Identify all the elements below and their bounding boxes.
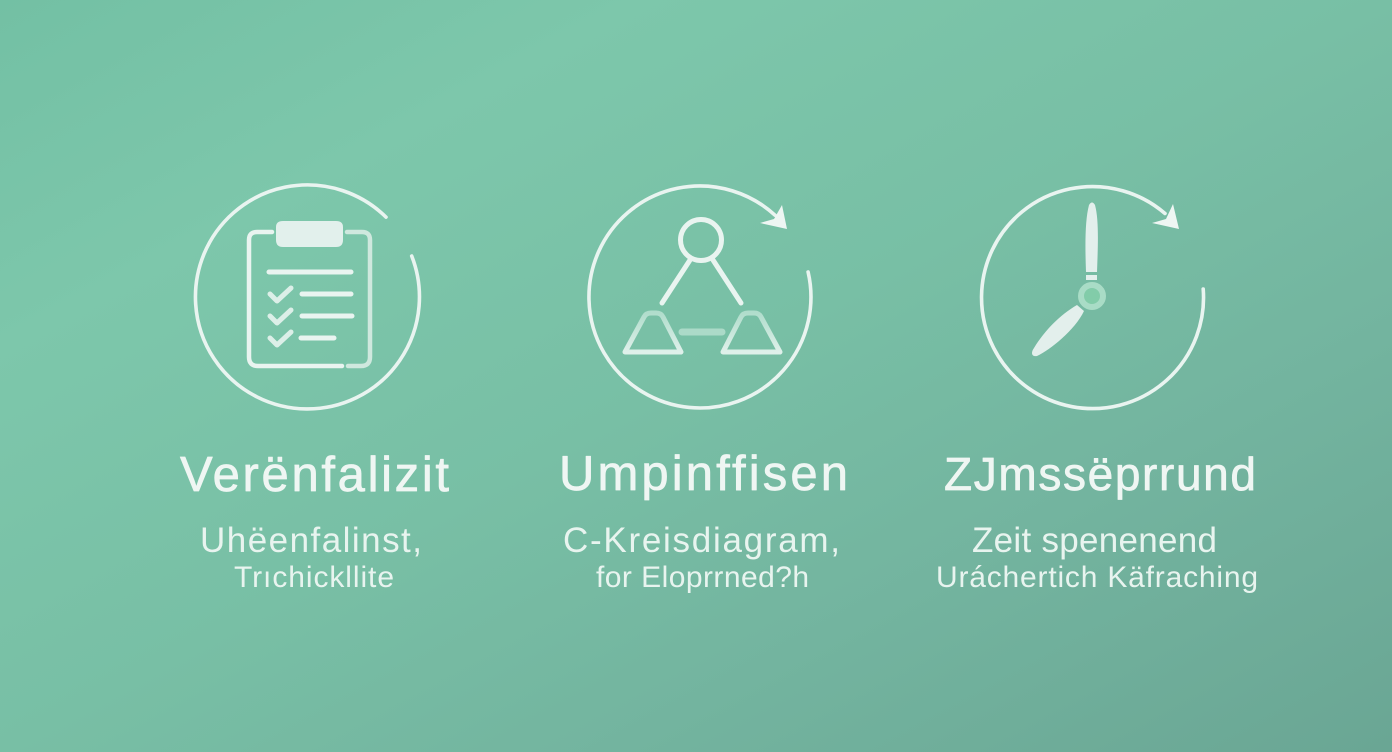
heading 3: ZJmssëprrund — [944, 448, 1256, 500]
subtext 3 line 2: Uráchertich Käfraching — [936, 561, 1258, 594]
icon: clipboard checklist in circle — [195, 185, 419, 409]
heading 2: Umpinffisen — [559, 447, 848, 501]
column 3 text — [936, 448, 1258, 594]
subtext 1 line 1: Uhëenfalinst, — [200, 521, 422, 560]
column 2 text — [559, 447, 848, 594]
heading 1: Verënfalizit — [180, 448, 449, 502]
column 1 text — [180, 448, 449, 594]
subtext 3 line 1: Zeit spenenend — [972, 521, 1217, 560]
icon: clock in circle with arrow — [982, 187, 1204, 409]
subtext 2 line 1: C-Kreisdiagram, — [563, 521, 840, 560]
subtext 2 line 2: for Eloprrned?h — [596, 561, 809, 594]
icon: triangle diagram in circle with arrow — [589, 186, 811, 408]
subtext 1 line 2: Trıchickllite — [234, 561, 394, 594]
